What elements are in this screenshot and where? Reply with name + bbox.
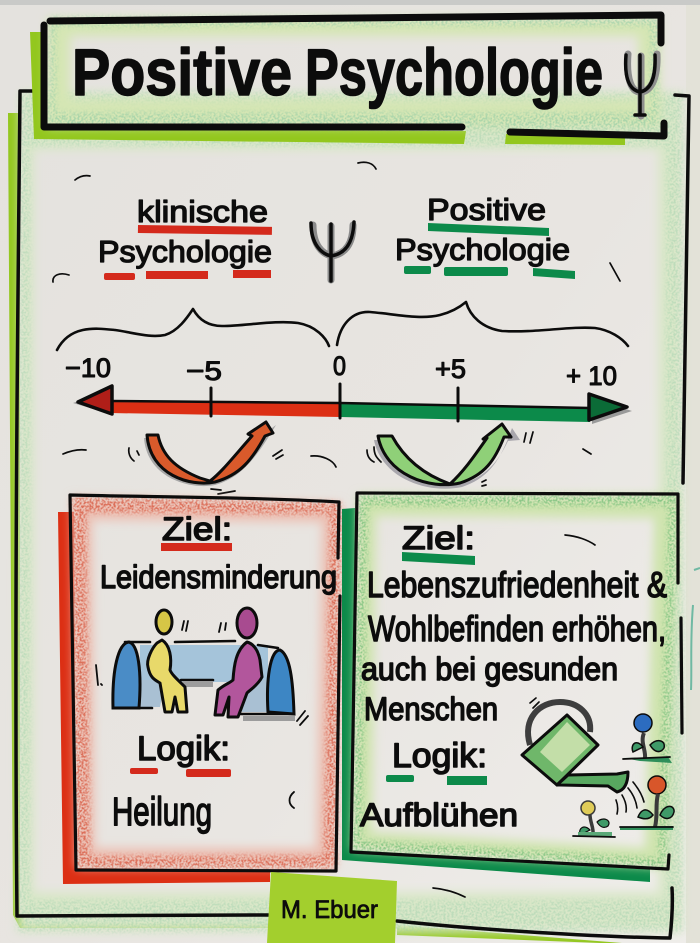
text: Heilung: Heilung <box>112 790 212 834</box>
speech ticks <box>96 621 308 725</box>
can handle <box>528 702 590 745</box>
margin teal marks <box>691 568 700 690</box>
ticks <box>211 384 458 421</box>
accent stroke <box>565 535 595 545</box>
heading: Positive Psychologie <box>395 192 575 279</box>
person yellow <box>148 610 187 712</box>
heading: Ziel: Ziel: <box>162 511 232 547</box>
illustration: two people on a sofa <box>96 608 308 725</box>
arrow: green curved <box>374 424 520 489</box>
title heading: Positive <box>72 35 292 109</box>
text: goal description: Menschen <box>364 691 498 727</box>
panel: positive psychology <box>342 493 682 882</box>
icon: psi symbol <box>626 54 657 116</box>
scale labels: −5 <box>186 356 222 386</box>
red half of axis <box>110 402 340 417</box>
scale labels: + 10 <box>566 361 617 391</box>
small accent strokes <box>53 162 620 897</box>
green box outline <box>351 493 682 869</box>
sofa <box>113 641 295 721</box>
scale labels: +5 <box>435 354 466 384</box>
title frame outline <box>44 15 664 136</box>
sticky note: author: M. Ebuer <box>281 896 378 924</box>
can body <box>522 715 598 785</box>
heading: Ziel green <box>402 520 475 565</box>
illustration: watering can <box>522 698 644 814</box>
scale axis <box>73 384 632 424</box>
heading: Logik green: Logik: <box>392 737 487 775</box>
illustration: blue flower <box>623 714 672 763</box>
brace: left <box>57 309 329 350</box>
title heading: Psychologie <box>305 35 603 109</box>
text: goal description: auch bei gesunden <box>361 651 618 687</box>
heading: Positive Psychologie: Psychologie <box>395 232 570 267</box>
water arcs <box>530 698 644 814</box>
can spout <box>557 772 628 792</box>
arrowhead left <box>73 390 110 414</box>
scale labels: −10 <box>65 353 111 383</box>
arrow: red curved <box>144 422 276 486</box>
person purple <box>215 608 262 717</box>
green marker shadow <box>342 508 650 882</box>
green half of axis <box>340 404 590 422</box>
text: Aufblühen: Aufblühen <box>360 797 518 833</box>
illustration: yellow flower <box>573 801 615 837</box>
illustration: orange flower <box>620 776 674 830</box>
text: goal description <box>361 564 667 727</box>
heading: klinische Psychologie <box>98 194 272 280</box>
panel: clinical psychology <box>58 495 341 884</box>
arrowhead right <box>592 398 632 424</box>
icon: psi symbol centre <box>311 222 354 281</box>
heading: klinische Psychologie: Psychologie <box>98 234 272 269</box>
heading: klinische Psychologie: klinische <box>137 194 268 229</box>
title green marker shadow <box>30 32 625 145</box>
heading: Positive Psychologie: Positive <box>427 192 546 227</box>
red marker shadow <box>58 512 270 884</box>
scale labels: 0 <box>333 351 346 381</box>
red pencil band <box>72 497 341 868</box>
panel: title banner <box>30 15 664 145</box>
green pencil band <box>352 495 677 868</box>
heading: Ziel green: Ziel: <box>402 520 475 556</box>
red box outline <box>70 495 340 871</box>
heading: Logik red: Logik: <box>137 730 230 768</box>
sticky note: author <box>267 872 397 943</box>
main frame green marker shadow <box>8 113 622 943</box>
text: Leidensminderung: Leidensminderung <box>100 559 337 595</box>
title heading <box>72 35 603 109</box>
scale labels <box>65 351 617 391</box>
brace: right <box>337 302 628 346</box>
